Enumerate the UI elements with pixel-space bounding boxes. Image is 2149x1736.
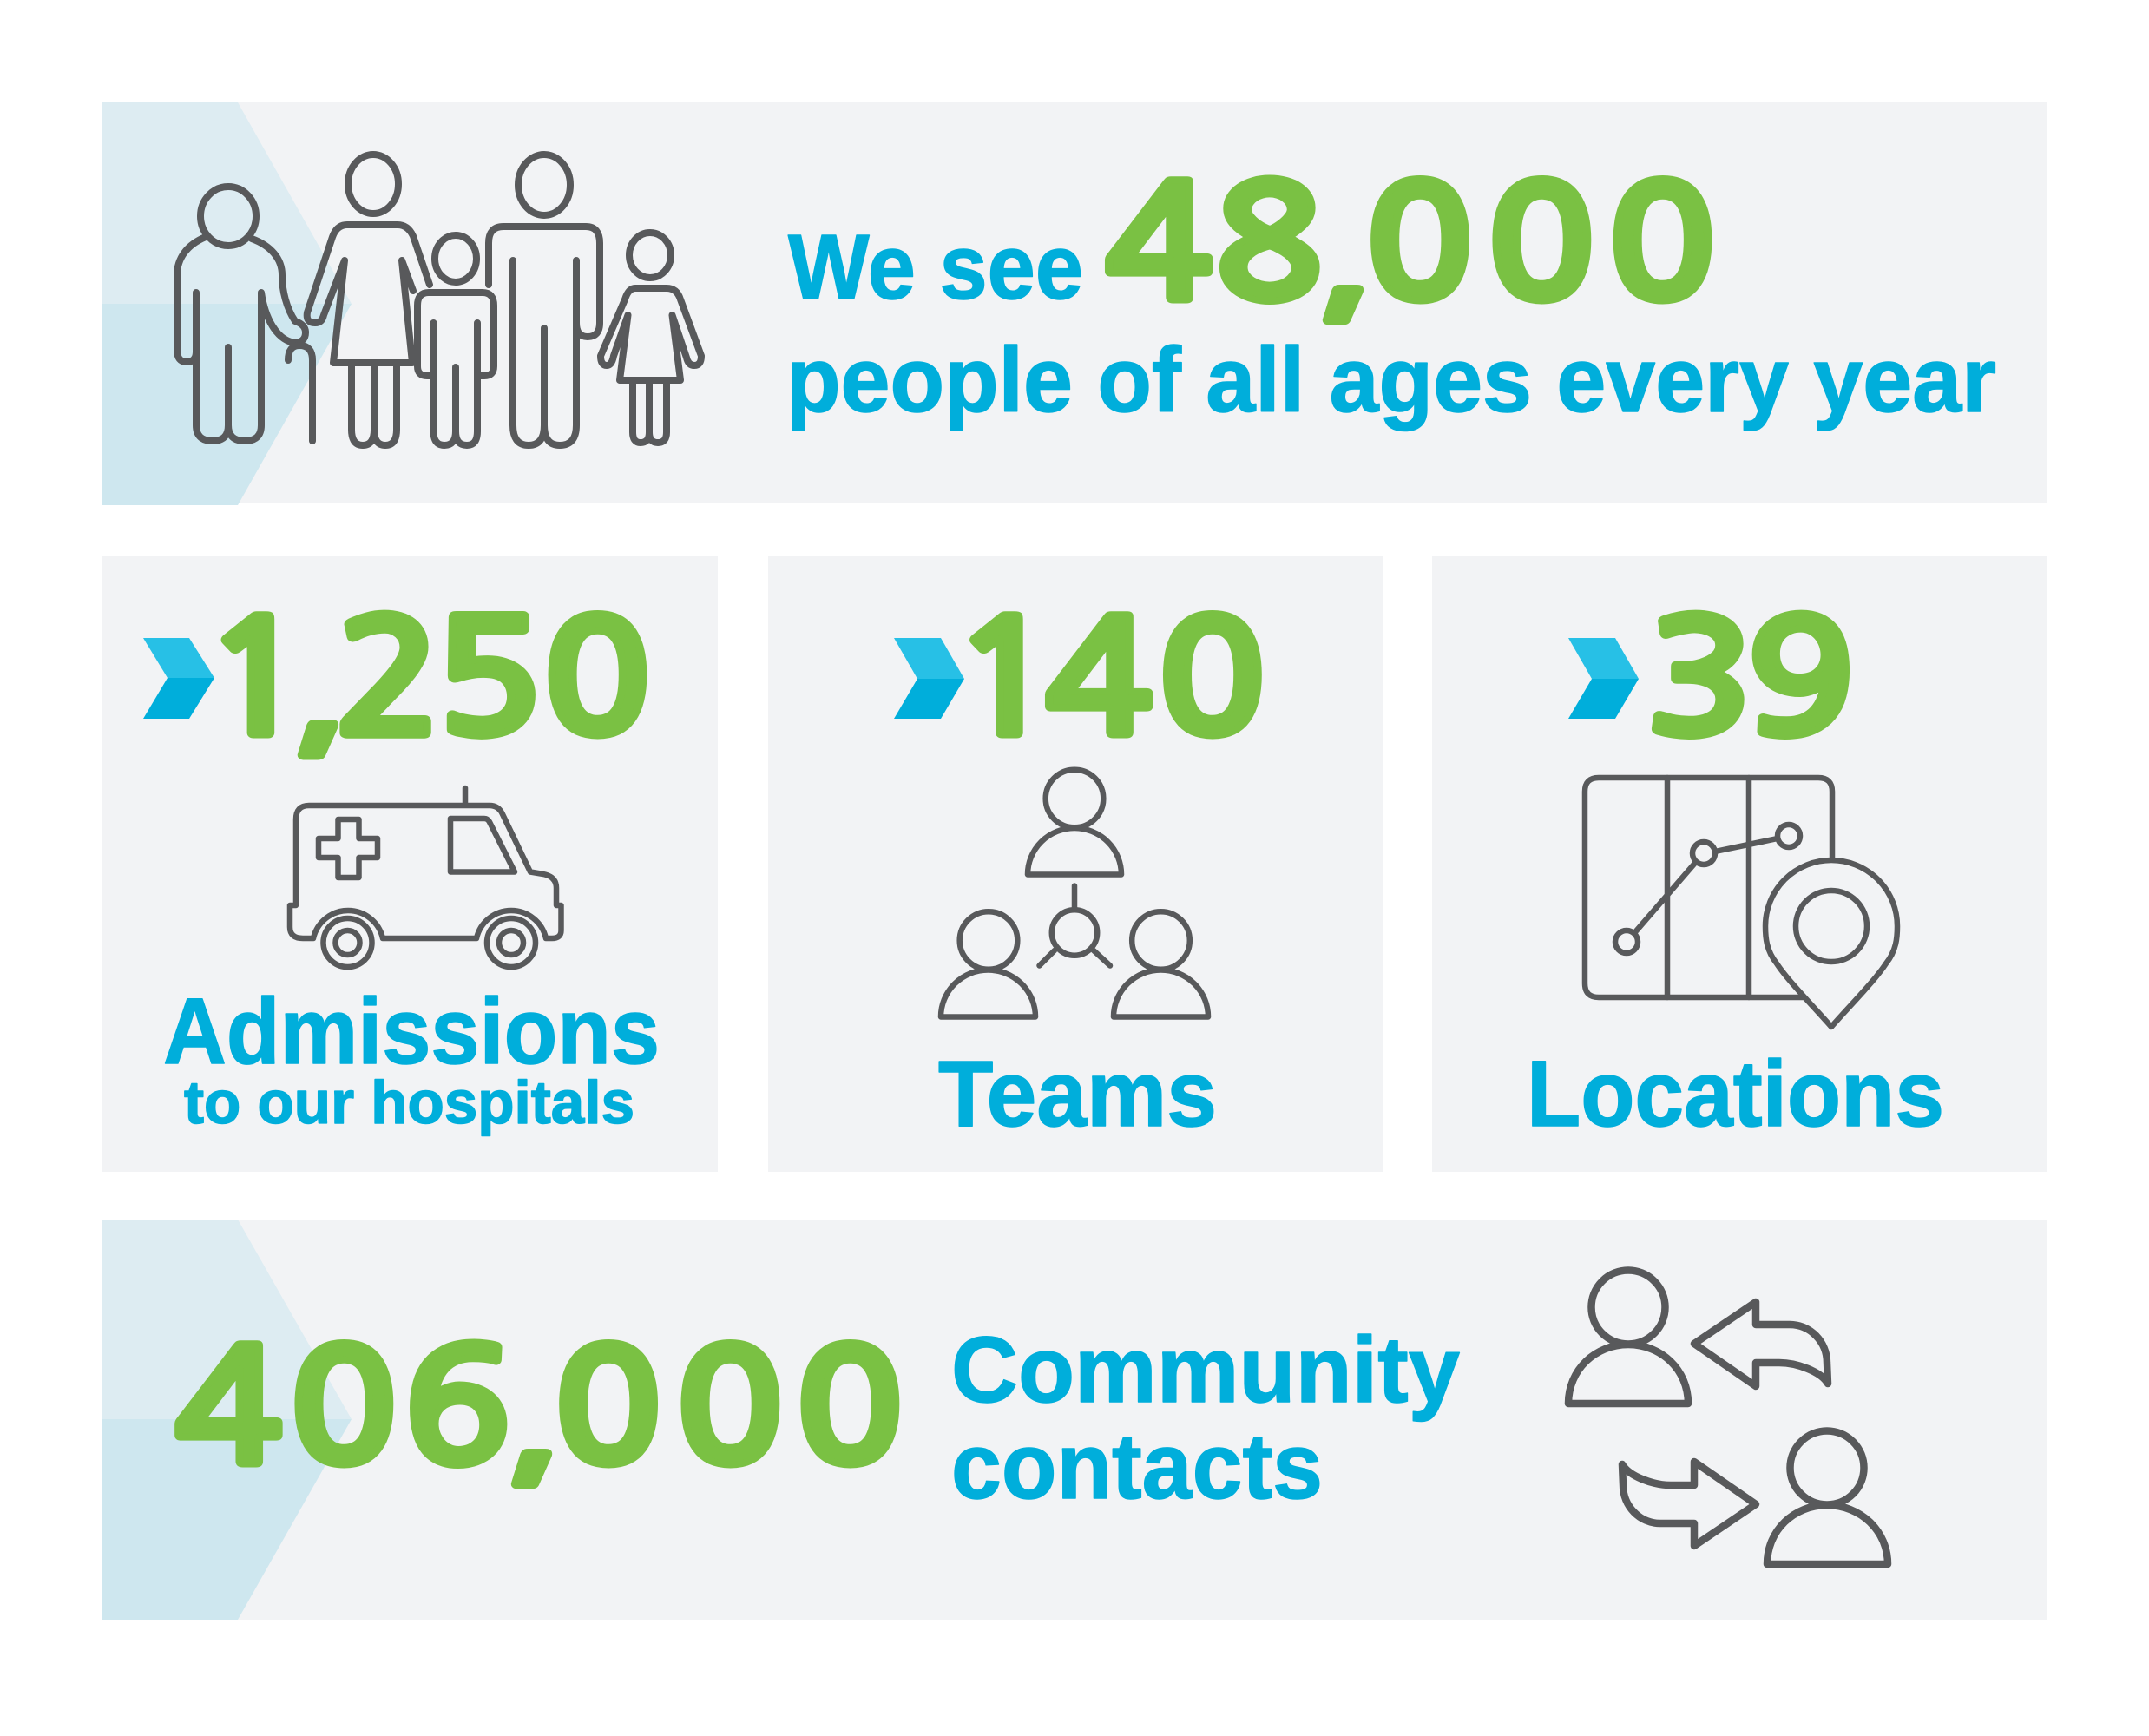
number: 140: 140 [950,602,1267,759]
text: Admissions: Admissions [163,978,660,1083]
panel: community contacts [102,1220,2047,1620]
text: We see: We see [788,216,1083,319]
number: 48,000: 48,000 [1104,168,1717,324]
number: 1,250: 1,250 [201,602,652,759]
text: to our hospitals: to our hospitals [184,1069,634,1136]
icon: team network [941,770,1208,1017]
text: Community: Community [951,1317,1460,1422]
text: people of all ages every year: people of all ages every year [786,329,1996,431]
text: contacts: contacts [951,1413,1323,1518]
panel: admissions [102,556,718,1172]
chevron background: top panel [102,102,352,505]
icon: people exchanging contact [1568,1271,1888,1564]
number: 406,000: 406,000 [174,1332,904,1488]
panel: 48,000 people [102,102,2047,505]
panel: locations [1432,556,2047,1172]
text: Teams: Teams [938,1041,1217,1146]
icon: chevron [143,638,214,719]
icon: family [177,155,701,445]
chevron background: bottom panel [102,1220,352,1620]
icon: chevron [1568,638,1639,719]
panel: teams [768,556,1383,1172]
icon: ambulance [290,788,561,967]
icon: chevron [894,638,964,719]
number: 39: 39 [1645,602,1856,759]
text: Locations: Locations [1527,1041,1944,1146]
icon: map and pin [1585,778,1897,1027]
